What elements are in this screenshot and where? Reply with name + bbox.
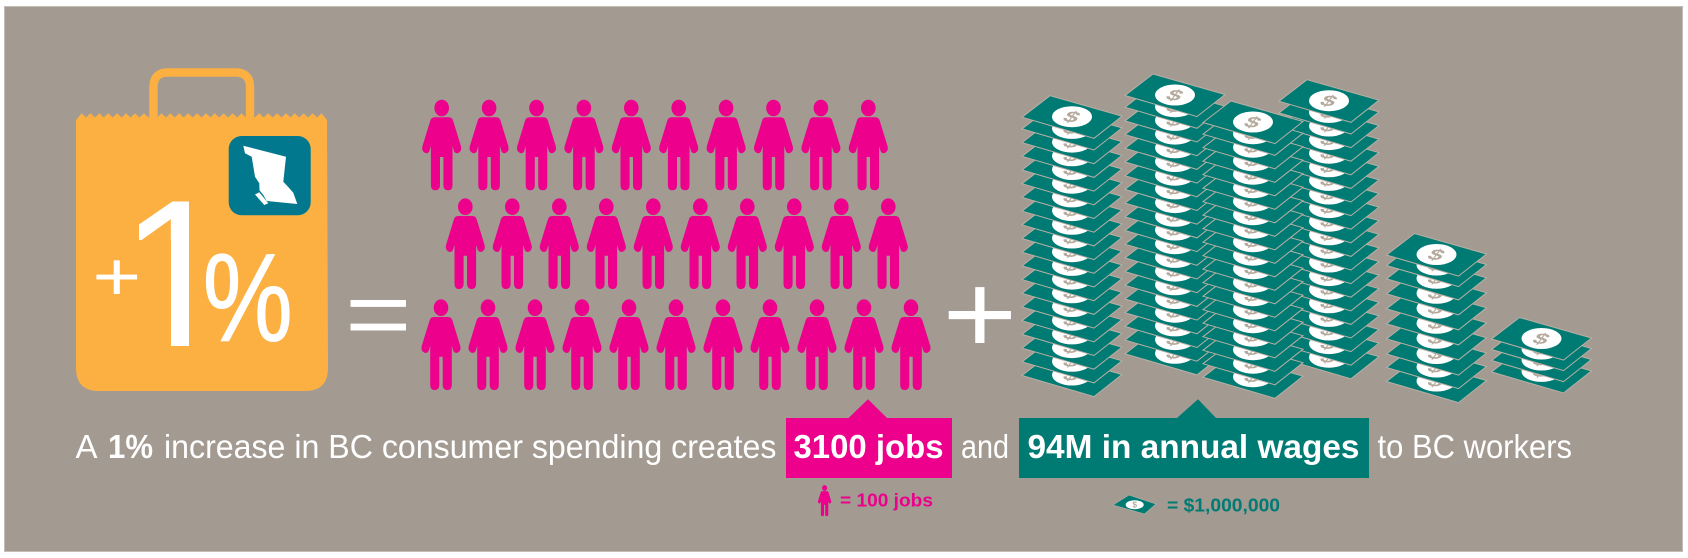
money stack 1: $ [1059,243,1085,261]
money stack 2: $ [1162,194,1188,212]
money stack 3: $ [1240,179,1266,197]
money stack 4: $ [1316,267,1342,285]
money stack 3: $ [1240,125,1266,143]
money stack 3: $ [1240,368,1266,386]
money stack 3: $ [1240,113,1266,131]
money stack 3: $ [1240,152,1266,170]
money stack 4: $ [1316,307,1342,326]
money stack 3: $ [1240,354,1266,373]
money stack 3: $ [1240,233,1266,251]
money stack 3: $ [1240,327,1266,346]
legend: $1,000,000: = $1,000,000 [1167,495,1280,516]
money stack 1: $ [1059,311,1085,330]
money stack 1: $ [1059,174,1085,193]
money stack 2: $ [1162,111,1188,130]
money stack 1 [1022,96,1122,397]
money stack 5: $ [1423,284,1449,303]
legend: 100 jobs [818,485,933,516]
money stack 3: $ [1240,287,1266,305]
people row 2 [446,198,908,289]
sentence text: 1% [108,428,153,465]
sentence text: and [961,428,1009,465]
money stack 2: $ [1162,317,1188,335]
money stack 2: $ [1162,98,1188,116]
money stack 2: $ [1162,248,1188,267]
money stack 2: $ [1162,276,1188,294]
equals sign: = [345,262,412,367]
money stack 2: $ [1162,303,1188,322]
money stack 2: $ [1162,235,1188,253]
money stack 4: $ [1316,348,1342,367]
money stack 4: $ [1316,158,1342,176]
money stack 3: $ [1240,246,1266,265]
money stack 3: $ [1240,206,1266,224]
money stack 4: $ [1316,199,1342,217]
money stack 2: $ [1162,290,1188,308]
money stack 6 [1492,318,1592,393]
money stack 5: $ [1423,358,1449,376]
sentence text: to BC workers [1378,428,1572,465]
plus sign: + [942,250,1017,377]
people row 1 [422,100,888,190]
text: +1%: % [203,229,293,368]
legend: 100 jobs: = 100 jobs [840,491,933,511]
bag body [76,113,328,391]
money stack 3: $ [1240,300,1266,319]
money stack 3 [1203,101,1303,398]
money stack 1: $ [1059,339,1085,357]
money stack 2: $ [1162,221,1188,239]
sentence text: A [76,428,98,465]
money stack 4: $ [1316,321,1342,339]
callout: 94M in annual wages: 94M in annual wages [1028,429,1360,466]
money stack 3: $ [1240,219,1266,238]
money stack 4: $ [1316,185,1342,203]
money stack 1: $ [1059,202,1085,220]
icon: bill: $ [1132,500,1137,510]
money stack 4: $ [1316,294,1342,312]
text: +1% [96,202,290,346]
money stack 1: $ [1059,133,1085,151]
money stack 6: $ [1528,340,1554,358]
money stack 2 [1125,74,1225,375]
money stack 1: $ [1059,188,1085,206]
money stack 1: $ [1059,284,1085,302]
money stack 5: $ [1423,345,1449,363]
money stack 2: $ [1162,207,1188,226]
money stack 1: $ [1059,161,1085,179]
money stack 4: $ [1316,92,1342,110]
money stack 4: $ [1316,131,1342,149]
money stack 1: $ [1059,270,1085,288]
money stack 2: $ [1162,262,1188,280]
money stack 3: $ [1240,260,1266,278]
money stack 5: $ [1423,372,1449,390]
money stack 4 [1279,80,1379,379]
icon: person [818,485,831,516]
money stack 5: $ [1423,256,1449,274]
money stack 4: $ [1316,239,1342,258]
money stack 6: $ [1528,362,1554,381]
money stack 6: $ [1528,351,1554,369]
money stack 1: $ [1059,108,1085,126]
money stack 5: $ [1423,246,1449,264]
money stack 1: $ [1059,366,1085,384]
money stack 4: $ [1316,103,1342,122]
money stack 3: $ [1240,138,1266,157]
money stack 1: $ [1059,352,1085,371]
money stack 2: $ [1162,180,1188,198]
money stack 1: $ [1059,325,1085,343]
text: +1%: + [92,239,141,315]
sentence text: increase in BC consumer spending creates [164,428,776,465]
money stack 3: $ [1240,165,1266,184]
money stack 4: $ [1316,253,1342,271]
icon: BC map badge [229,136,311,215]
money stack 1: $ [1059,147,1085,165]
callout: 94M in annual wages [1019,399,1369,478]
money stack 5 [1386,234,1486,403]
money stack 5: $ [1423,329,1449,348]
callout: 3100 jobs [786,399,952,478]
money stack 2: $ [1162,125,1188,143]
money stack 4: $ [1316,280,1342,299]
people row 3 [421,299,931,390]
money stack 4: $ [1316,144,1342,163]
money stack 5: $ [1423,299,1449,318]
money stack 2: $ [1162,331,1188,349]
money stack 2: $ [1162,139,1188,157]
money stack 2: $ [1162,344,1188,363]
money stack 5: $ [1423,314,1449,333]
money stack 1: $ [1059,119,1085,138]
bag handle [154,72,250,120]
money stack 3: $ [1240,192,1266,211]
money stack 4: $ [1316,335,1342,353]
money stack 6: $ [1528,330,1554,348]
money stack 4: $ [1316,117,1342,135]
money stack 2: $ [1162,86,1188,104]
money stack 4: $ [1316,171,1342,190]
icon: bill [1113,495,1156,514]
money stack 3: $ [1240,341,1266,359]
sentence text [76,428,1572,465]
icon: shopping bag with +1% [76,72,328,391]
money stack 4: $ [1316,212,1342,231]
money stack 2: $ [1162,166,1188,185]
money stack 4: $ [1316,226,1342,244]
legend: $1,000,000 [1113,495,1280,516]
money stack 3: $ [1240,314,1266,332]
money stack 1: $ [1059,215,1085,234]
money stack 1: $ [1059,229,1085,247]
money stack 1: $ [1059,256,1085,275]
money stack 1: $ [1059,298,1085,316]
money stack 5: $ [1423,269,1449,288]
money stack 2: $ [1162,153,1188,171]
callout: 3100 jobs: 3100 jobs [794,429,944,466]
text: +1%: 1 [118,156,235,391]
money stack 3: $ [1240,273,1266,292]
